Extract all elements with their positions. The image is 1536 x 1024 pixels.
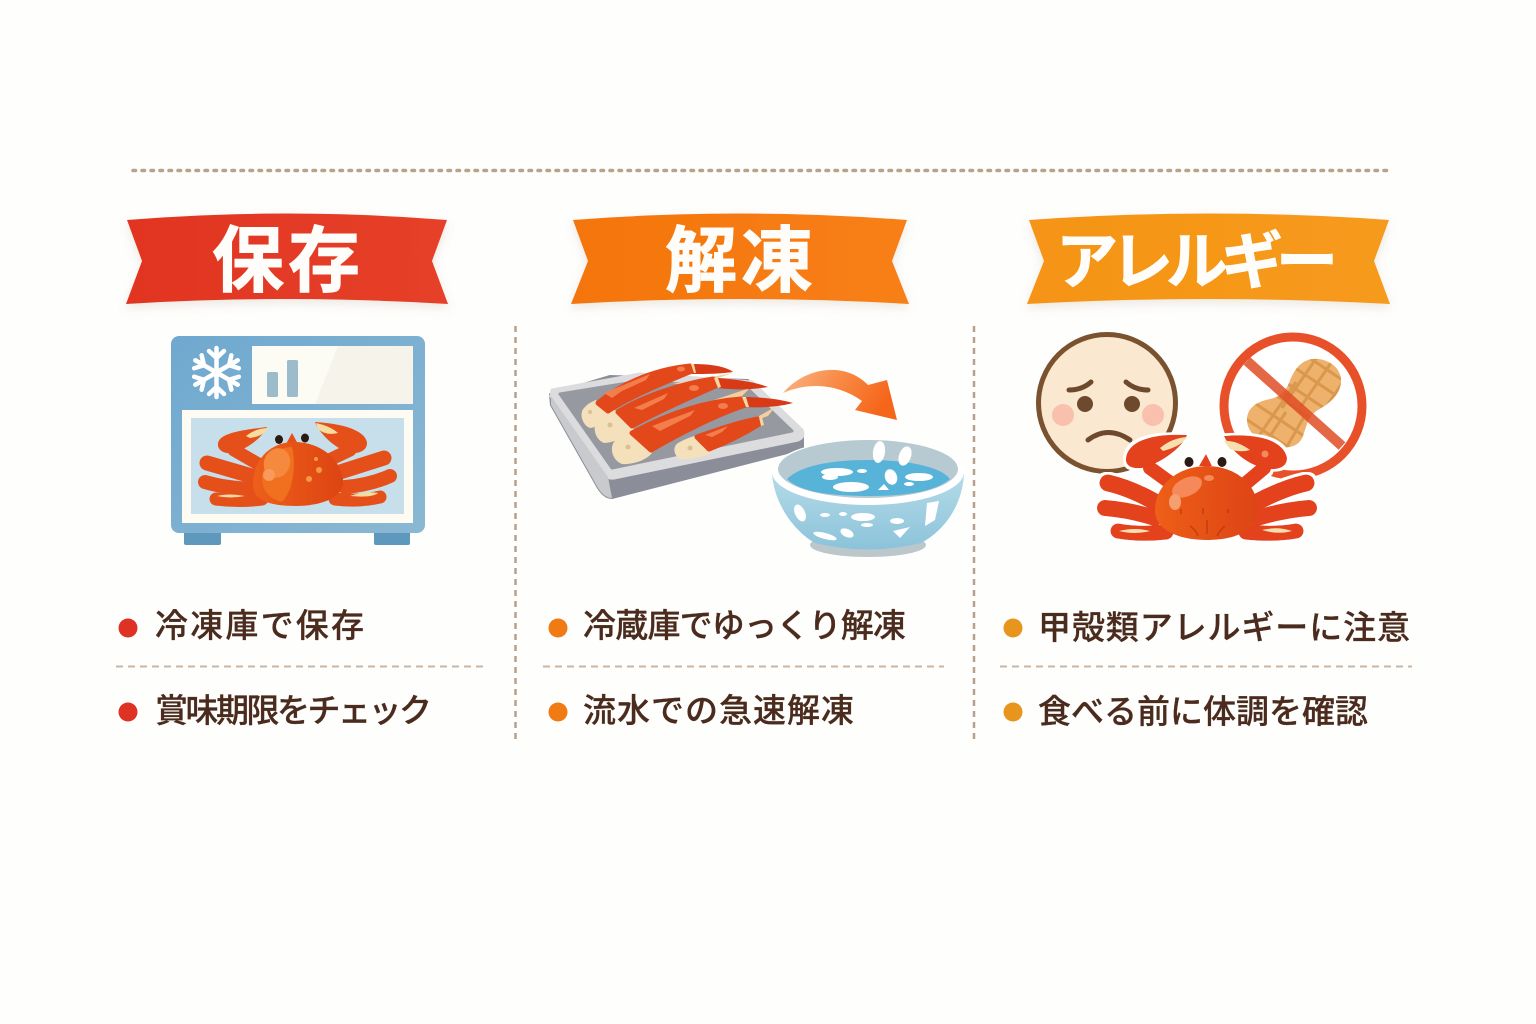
bullet: allergy 2: 食べる前に体調を確認: [1038, 693, 1368, 730]
bullet: allergy 1: 甲殻類アレルギーに注意: [1038, 609, 1410, 646]
icon: crab in freezer: [205, 422, 390, 506]
icon: freezer with crab: [171, 336, 425, 545]
bullet: storage 2: 賞味期限をチェック: [155, 692, 432, 729]
banner: storage: 保存: [212, 222, 360, 302]
banner: allergy: アレルギー: [1056, 228, 1338, 297]
icon: worried face: [1038, 334, 1176, 472]
bullet: thawing 2: 流水での急速解凍: [583, 692, 854, 729]
crab meat ends: [582, 400, 711, 464]
bullet: storage 1: 冷凍庫で保存: [155, 607, 364, 644]
panel: allergy: [1000, 214, 1412, 730]
arrow: to water bowl: [783, 370, 897, 420]
banner: allergy: [1027, 214, 1390, 304]
crab leg shells: [598, 366, 761, 450]
banner: storage: [126, 214, 448, 304]
icon: crab: [1105, 435, 1309, 540]
icon: no peanut sign: [1224, 337, 1362, 475]
icon: tray of crab legs: [550, 364, 803, 498]
icon: snowflake: [192, 348, 241, 397]
panel: thawing: [543, 214, 964, 729]
banner: thawing: 解凍: [665, 222, 813, 302]
panel: storage: [116, 214, 484, 729]
crab details: [1119, 437, 1292, 536]
icon: bowl of water: [772, 439, 964, 557]
bullet: thawing 1: 冷蔵庫でゆっくり解凍: [583, 607, 906, 644]
banner: thawing: [571, 214, 909, 304]
